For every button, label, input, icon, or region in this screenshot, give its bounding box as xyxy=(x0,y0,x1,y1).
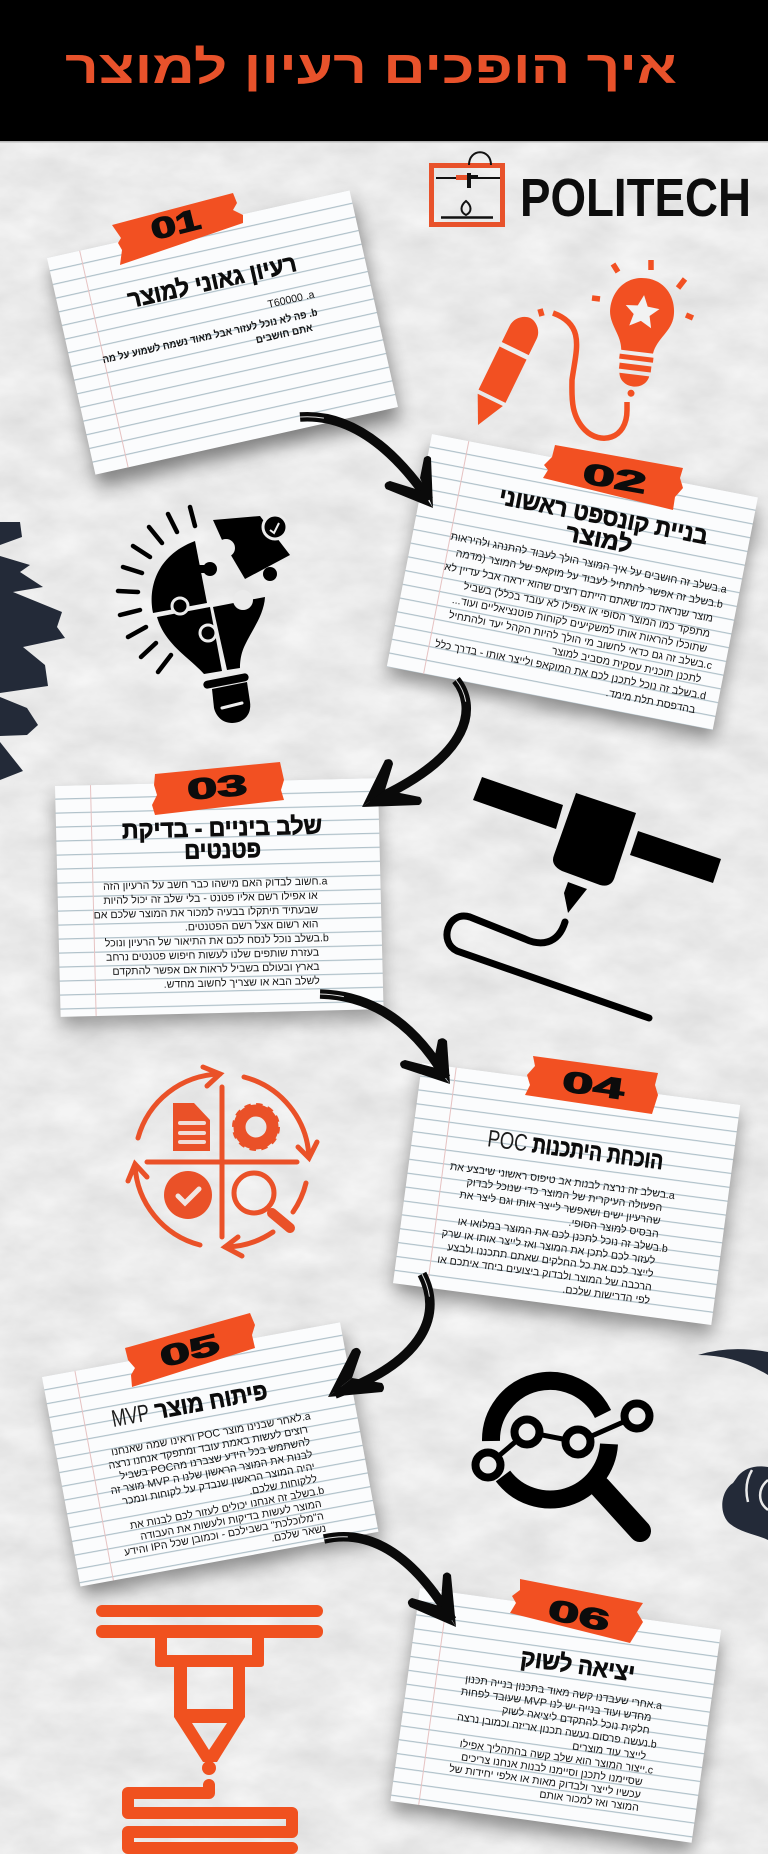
panel: step 03: פטנטים xyxy=(184,836,261,865)
arrow: step 2 to 3 xyxy=(362,680,466,807)
panel: step 05: להשתמש בכל הידע שצברנו מהPOC בשביל xyxy=(119,1436,312,1483)
panel: step 03: הוא רשום אצל רשם הפטנטים. xyxy=(185,918,319,933)
panel: step 06: עכשיו לייצר ולבדוק מאות או אלפי יחידות של xyxy=(448,1763,641,1801)
panel: step 03 xyxy=(55,762,384,1027)
arrow: step 3 to 4 xyxy=(320,994,450,1084)
arrow: step 4 to 5 xyxy=(328,1274,430,1397)
panel: step 02: מתפקד כמו המוצר הסופי או אפילו לא עובד בכלל) בשביל xyxy=(462,580,711,640)
panel: step 04: הרכבה של המוצר ולבדוק ביצועים ביחד איתכם או xyxy=(437,1254,652,1294)
icon: pencil and light bulb xyxy=(465,260,693,438)
panel: step 03: או אפילו רשם אליו פטנט - בלי שלב זה יכול להיות xyxy=(103,890,318,907)
arrow: step 5 to 6 xyxy=(324,1537,456,1627)
panel: step 06: c.ייצור המוצר הוא שלב קשה בהתהליך אפילו xyxy=(459,1738,655,1777)
panel: step 05 xyxy=(42,1313,381,1597)
icon: 3D printer nozzle black xyxy=(447,777,721,1018)
panel: step 04: לייצר לכם את כל החלקים שאתם תתכננו ולבצע xyxy=(446,1241,655,1280)
panel: step 06: 06 xyxy=(545,1594,613,1638)
panel: step 06 xyxy=(390,1579,721,1853)
panel: step 05: a.לאחר שבנינו מוצר POC וראינו שמה שאנחנו xyxy=(110,1410,312,1459)
panel: step 01 xyxy=(47,190,401,487)
panel: step 05: המוצר לעשות בדיקות ולעשות את העבודה xyxy=(139,1498,323,1543)
panel: step 05: רוצים לעשות באמת עובד ומתפקד אנחנו נרצה xyxy=(107,1424,309,1472)
icon: orange process cycle xyxy=(128,1067,317,1256)
panel: step 05: ללקוחות שלכם. xyxy=(248,1473,318,1497)
arrow: step 1 to 2 xyxy=(300,417,433,508)
panel: step 04: POC xyxy=(486,1125,529,1157)
panel: step 06: b.נעשה פרסום נעשה תכנון אריזה וכמובן נרצה xyxy=(456,1711,658,1751)
panel: step 04: הוכחת היתכנות xyxy=(531,1131,665,1175)
panel: step 05: b.בשלב זה אנחנו יכולים לעזור לכם לבנות את xyxy=(129,1485,325,1532)
panel: step 04: לפי הדרישות שלכם. xyxy=(562,1284,651,1307)
panel: step 06: מחדש ועוד בנייה יש לנו MVP שעובד לפחות xyxy=(460,1686,652,1724)
panel: step 02 xyxy=(387,434,758,740)
panel: step 04: הפעולה העיקרית של המוצר כדי שנוכל לבדוק xyxy=(466,1176,663,1214)
panel: step 02: b.בשלב זה אפשר להתחיל לעבוד על מוקאפ של המוצר (מדמה xyxy=(455,547,724,611)
panel: step 03: לשלב הבא או שצריך לחשוב מחדש. xyxy=(164,975,320,991)
panel: step 02: d.בשלב זה נוכל לתכנן לכם את המוקאפ ולייצר אותו - בדרך כלל xyxy=(434,638,707,703)
panel: step 06: יציאה לשוק xyxy=(519,1645,637,1687)
panel: step 02: מוצר שנראה כמו שאתם הייתם רוצים שהוא יראה אבל עדיין לא xyxy=(443,561,714,625)
panel: step 01: אתם חושבים xyxy=(255,322,315,346)
panel: step 01: a‏.‏ T60000 xyxy=(267,289,316,311)
panel: step 01: 01 xyxy=(148,204,204,247)
panel: step 03: בארץ ובעולם בשביל לראות אם אפשר להתקדם xyxy=(112,961,320,978)
panel: step 02: בהדפסת תלת מימד. xyxy=(605,687,696,716)
panel: step 02: למוצר xyxy=(564,520,634,559)
panel: step 04: לעזור לכם לתכן את המוצר ואז לייצר אותו או שרק xyxy=(441,1227,656,1267)
panel: step 04 xyxy=(393,1056,740,1335)
panel: step 02: c.בשלב זה גם כדאי לחשוב מי הולך להיות הקהל יעד ולהתחיל xyxy=(448,609,714,672)
panel: step 02: שתוכלו להראות אותו למשקיעים לקוחות פוטנציאליים ועוד... xyxy=(451,594,708,655)
panel: step 01: b. פה לא נוכל לעזור אבל מאוד נשמח לשמוע על מה xyxy=(101,306,319,366)
logo: Politech xyxy=(432,152,751,228)
panel: step 05: ה"מלוכלכת" בשבילכם - וכמובן שכל הIP והידע xyxy=(123,1510,325,1559)
panel: step 03: a.חשוב לבדוק האם מישהו כבר חשב על הרעיון הזה xyxy=(103,875,328,893)
panel: step 01: רעיון גאוני למוצר xyxy=(125,250,299,314)
panel: step 04: a.בשלב זה נרצה לבנות אב טיפוס ראשוני שיבצע את xyxy=(449,1161,676,1202)
panel: step 06: לייצר עוד מוצרים xyxy=(571,1740,647,1763)
panel: step 02: בניית קונספט ראשוני xyxy=(497,483,710,550)
panel: step 03: שלב ביניים - בדיקת xyxy=(122,812,322,844)
panel: step 02: לתכנן תוכנית עסקית מסביב למוצר xyxy=(551,645,703,686)
panel: step 03: שבעתיד תיתקלו בבעיה למכור את המוצר שלכם אם xyxy=(93,904,319,921)
title band: איך הופכים רעיון למוצר xyxy=(65,41,677,93)
decoration: navy shapes right xyxy=(698,1349,768,1540)
panel: step 06: חלקית נוכל להתקדם ליציאה לשוק xyxy=(501,1704,650,1737)
panel: step 05: MVP xyxy=(109,1399,152,1433)
panel: step 02: 02 xyxy=(580,458,649,500)
title band xyxy=(0,0,768,142)
decoration: navy brush stroke left xyxy=(0,522,65,780)
panel: step 05: פיתוח מוצר xyxy=(153,1378,270,1425)
panel: step 06: שסיימנו לתכנן וסיימנו לבנות אנחנו צריכים xyxy=(460,1751,643,1788)
icon: orange 3D printer head xyxy=(96,1605,323,1848)
panel: step 04: הבסיס למוצר הסופי. xyxy=(568,1217,659,1241)
panel: step 04: b.בשלב זה נוכל לתכנן לכם את המוצר במלואו או xyxy=(457,1216,669,1255)
panel: step 03: 03 xyxy=(186,769,248,807)
panel: step 05: לבנות את המוצר הראשון שלנו ה MVP מוצר זה xyxy=(110,1448,314,1497)
panel: step 03: b.בשלב נוכל לנסח לכם את התיאור של הרעיון ונוכל xyxy=(105,932,329,950)
panel: step 06: המוצר ואז למכור אותם xyxy=(539,1788,640,1814)
panel: step 06: a.אחרי שעבדנו קשה מאוד בתכנון בנייה תכנון xyxy=(464,1673,663,1712)
panel: step 02: a.בשלב זה חושבים על איך המוצר הולך לעבוד להתנהג ולהיראות xyxy=(450,531,728,596)
icon: puzzle light bulb xyxy=(118,507,290,723)
panel: step 04: 04 xyxy=(560,1066,626,1106)
panel: step 05: נשאר שלכם. xyxy=(270,1523,327,1545)
panel: step 03: בעזרת שותפים שלנו לעשות חיפוש פטנטים נרחב xyxy=(106,947,319,964)
panel: step 05: 05 xyxy=(157,1328,223,1374)
panel: step 04: שהרעיון ישים ושאפשר לייצר אותו וגם ליצר את xyxy=(459,1189,661,1227)
panel: step 05: יהיה המוצר הראשון שנבדק על לקוחות ונמכר xyxy=(121,1461,316,1508)
icon: magnifier with chart xyxy=(476,1381,650,1531)
